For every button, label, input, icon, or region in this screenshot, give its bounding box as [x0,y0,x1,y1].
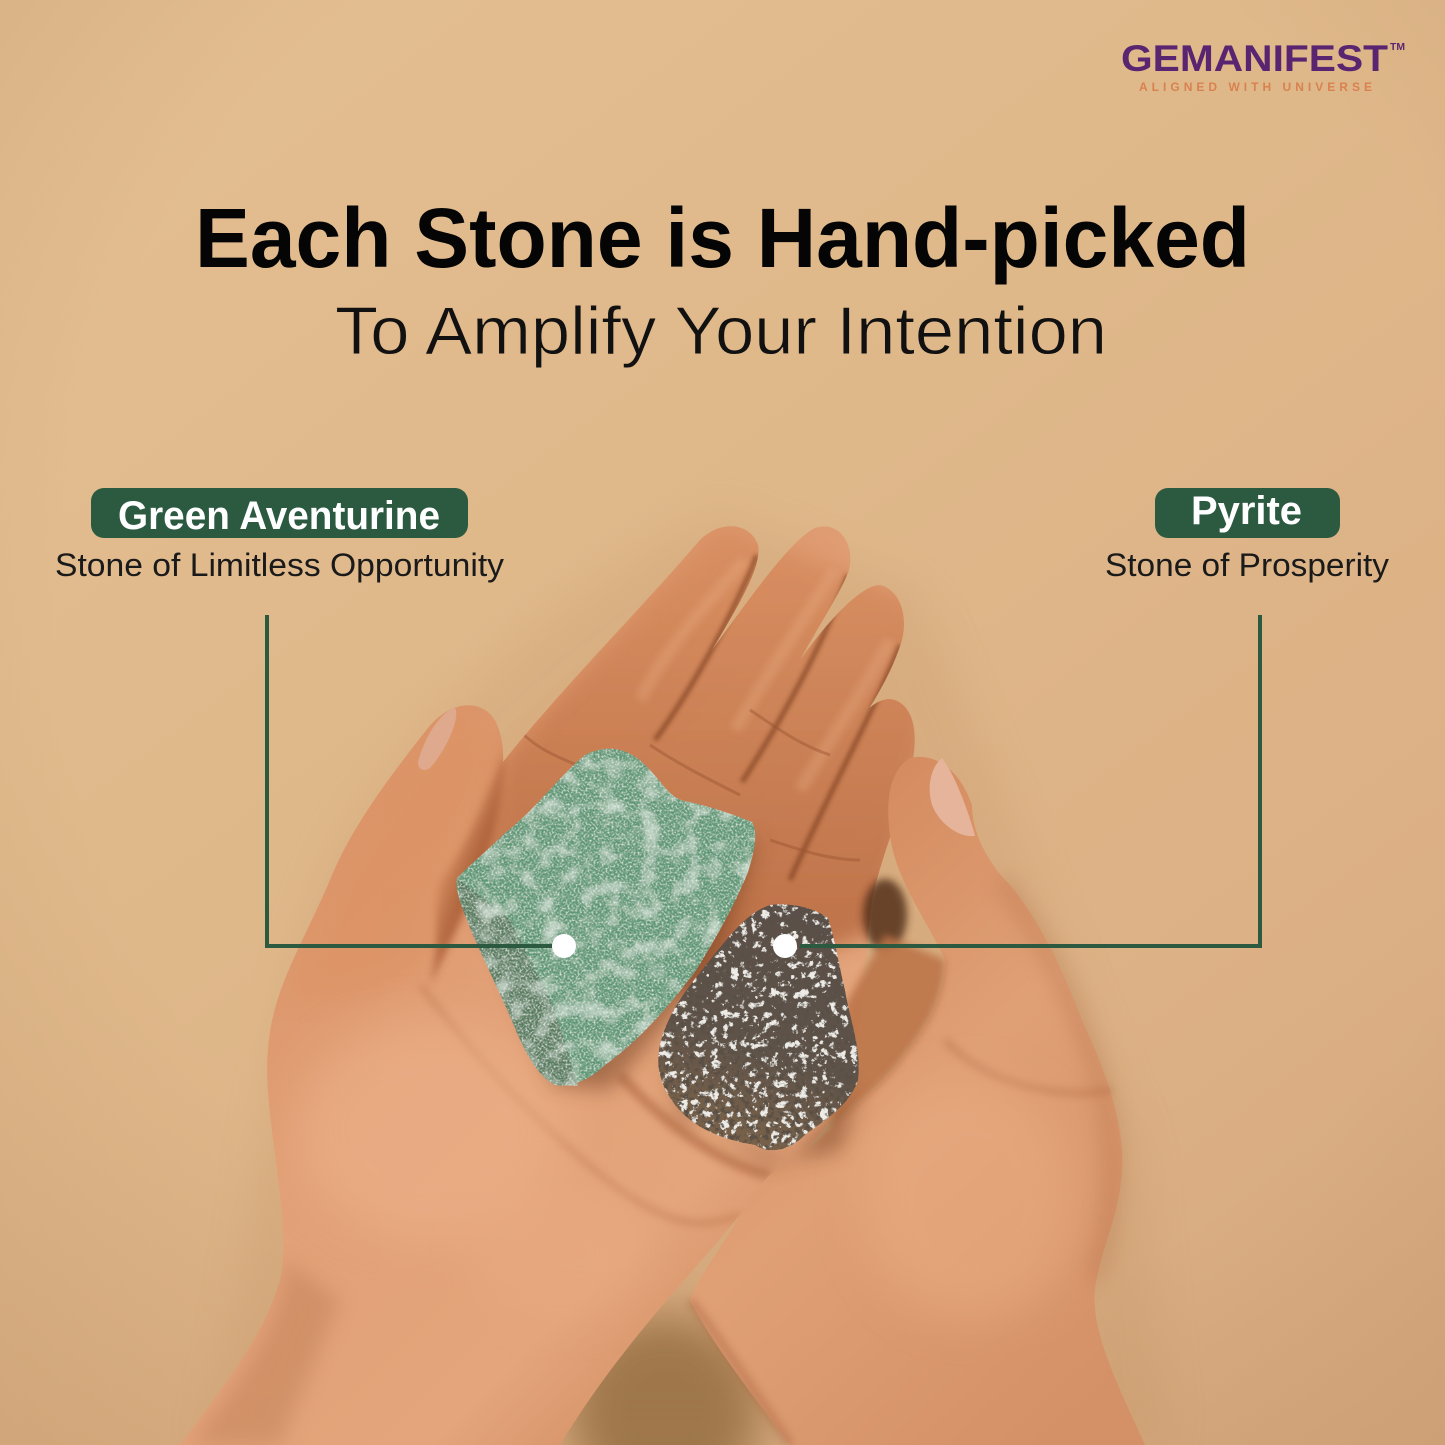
title: Each Stone is Hand-picked [195,191,1250,285]
right hand with thumb [690,757,1145,1445]
pill [1155,488,1340,538]
logo tagline: ALIGNED WITH UNIVERSE [1139,80,1372,94]
logo trademark: TM [1390,42,1405,53]
name: Pyrite [1191,489,1302,533]
marker: green aventurine dot [552,934,576,958]
photo: pyrite stone [658,904,859,1150]
label: green aventurine [55,488,504,583]
stone shadows [470,835,860,1165]
left hand with fingers [180,525,930,1445]
icon: thumb nail left [418,708,456,770]
callout: pyrite leader line [800,615,1260,946]
icon: thumb nail right [930,758,975,836]
description: Stone of Limitless Opportunity [55,547,504,583]
logo [1121,38,1405,94]
name: Green Aventurine [118,494,440,538]
pill [91,488,468,538]
photo: two cupped hands [180,525,1145,1445]
logo wordmark: GEMANIFEST [1121,38,1388,79]
marker: pyrite dot [773,934,797,958]
photo: green aventurine stone [457,749,755,1086]
subtitle: To Amplify Your Intention [335,293,1107,369]
callout: green aventurine leader line [267,615,552,946]
finger seams [655,555,900,880]
label: pyrite [1105,488,1389,583]
description: Stone of Prosperity [1105,547,1389,583]
